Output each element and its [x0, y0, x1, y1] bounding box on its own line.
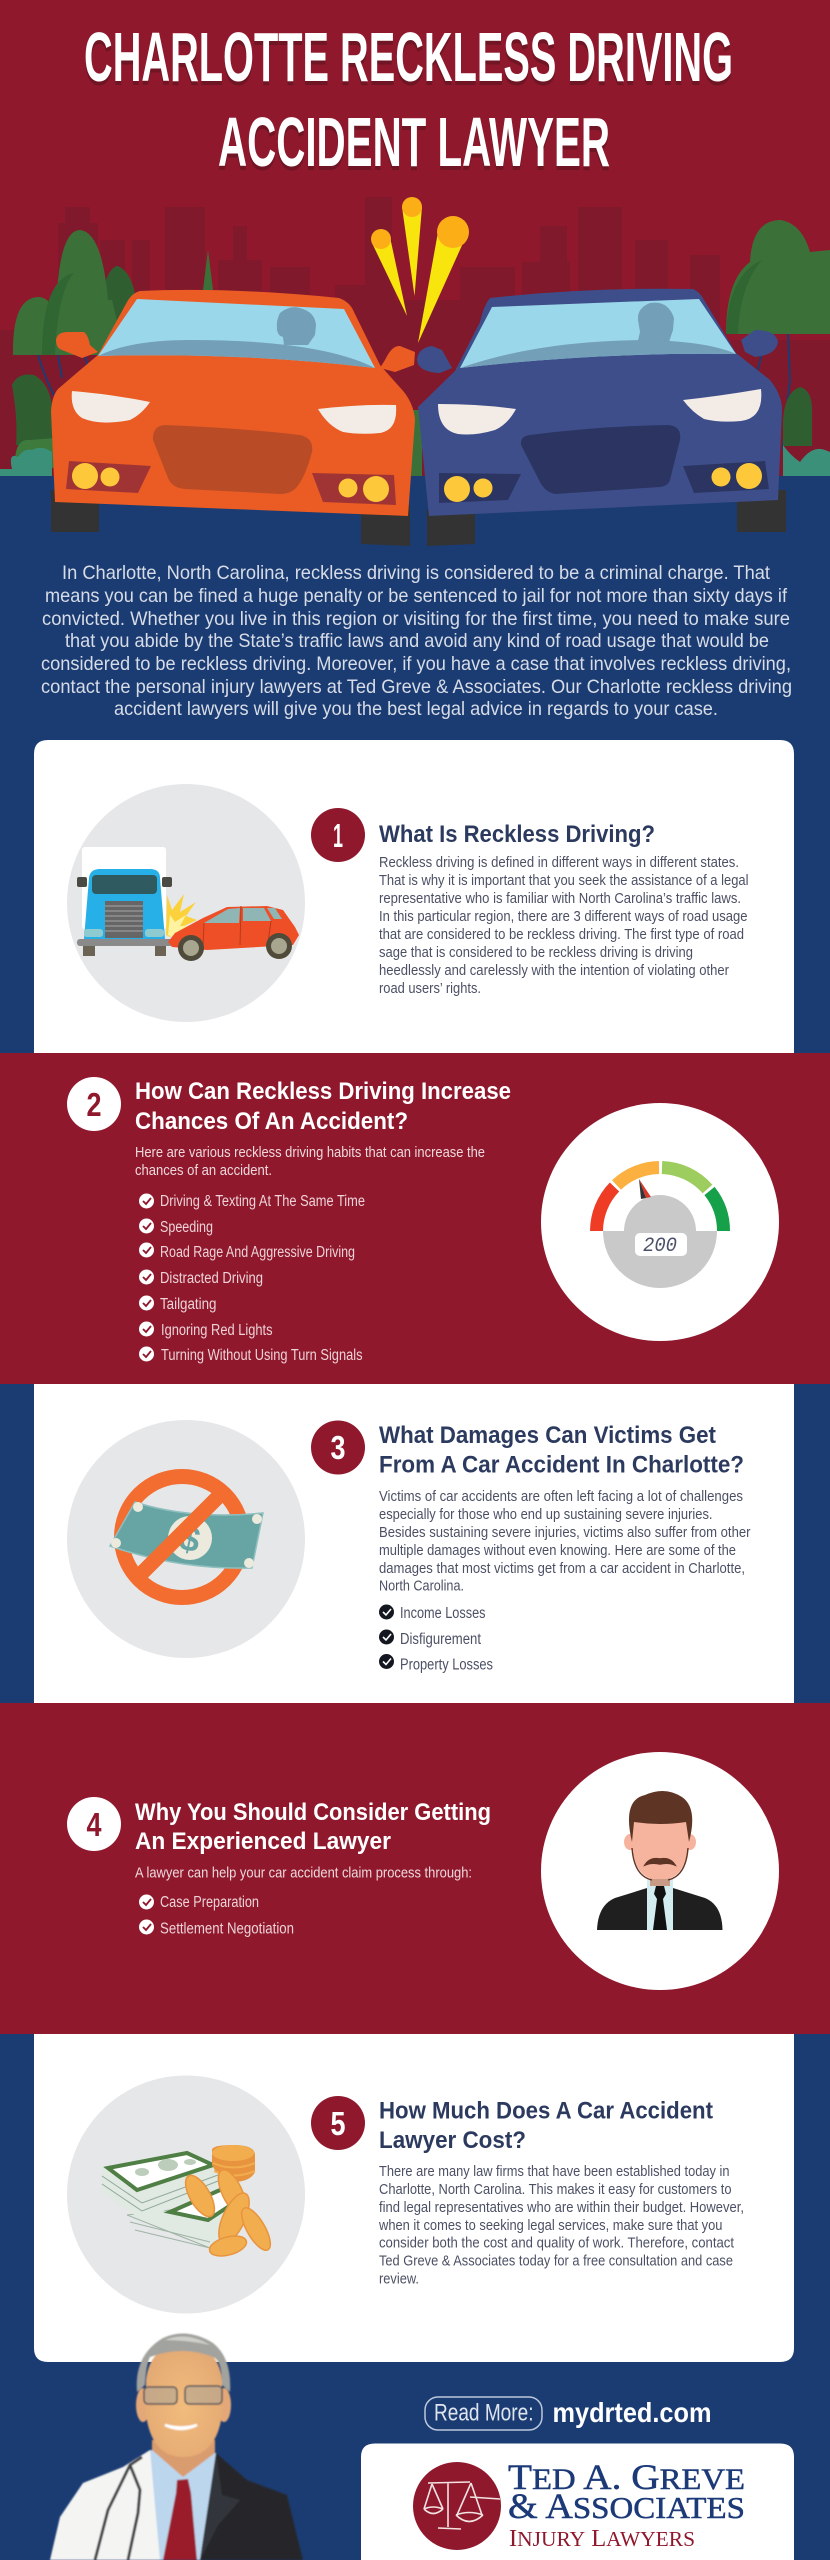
heading 5: How Much Does A Car Accident — [379, 2098, 713, 2124]
blue car — [417, 289, 786, 546]
right trees — [726, 220, 830, 476]
firm name: TED A. GREVE — [508, 2457, 745, 2497]
heading 1: What Is Reckless Driving? — [379, 821, 655, 848]
body text 1: road users’ rights. — [379, 980, 481, 997]
body text 2: Here are various reckless driving habits that can increase the — [135, 1144, 485, 1161]
impact sparks — [371, 197, 469, 343]
body text 3: damages that most victims get from a car accident in Charlotte, — [379, 1560, 745, 1577]
body text 5: Ted Greve & Associates today for a free consultation and case — [379, 2252, 733, 2270]
checklist 2: Driving & Texting At The Same Time — [160, 1193, 365, 1210]
body text 1: that are considered to be reckless driving. The first type of road — [379, 926, 744, 943]
panel: section 5 lawyer cost — [34, 2034, 794, 2362]
checklist 2: Speeding — [160, 1219, 213, 1236]
body text 5: find legal representatives who are within their budget. However, — [379, 2199, 744, 2216]
body text 3: North Carolina. — [379, 1578, 464, 1594]
read more link: mydrted.com — [552, 2397, 712, 2428]
badge 3: 3 — [330, 1429, 346, 1466]
body text 3: Besides sustaining severe injuries, victims also suffer from other — [379, 1524, 750, 1541]
icon: lawyer portrait — [541, 1752, 779, 1990]
body text 2: chances of an accident. — [135, 1162, 272, 1179]
panel: section 1 what is reckless driving — [34, 740, 794, 1053]
panel: section 4 experienced lawyer — [0, 1703, 830, 2034]
badge 2: 2 — [86, 1086, 102, 1123]
body text 1: heedlessly and carelessly with the intention of violating other — [379, 962, 729, 979]
heading 5 — [379, 2098, 713, 2154]
intro paragraph: convicted. Whether you live in this region or visiting for the first time, you need to make sure — [42, 608, 790, 630]
body text 2 — [135, 1144, 485, 1179]
intro paragraph: In Charlotte, North Carolina, reckless driving is considered to be a criminal charge. That — [62, 562, 771, 584]
portrait: doctor in coat and suit — [50, 2334, 303, 2560]
body text 1: representative who is familiar with North Carolina’s traffic laws. — [379, 890, 741, 907]
icon: scales of justice — [413, 2462, 501, 2550]
icon: money stacks and coins — [67, 2076, 305, 2314]
intro paragraph: means you can be fined a huge penalty or be sentenced to jail for not more than sixty days if — [45, 585, 788, 607]
badge 3 — [311, 1420, 365, 1474]
heading 4: An Experienced Lawyer — [135, 1828, 391, 1855]
body text 1: In this particular region, there are 3 different ways of road usage — [379, 908, 748, 925]
body text 5: consider both the cost and quality of work. Therefore, contact — [379, 2234, 735, 2252]
body text 5: review. — [379, 2270, 419, 2288]
checklist 2: Ignoring Red Lights — [161, 1322, 273, 1339]
intro paragraph: accident lawyers will give you the best legal advice in regards to your case. — [114, 698, 718, 720]
checklist 3: Disfigurement — [400, 1631, 482, 1648]
body text 4: A lawyer can help your car accident claim process through: — [135, 1864, 472, 1882]
panel: section 2 increased accident chances — [0, 1053, 830, 1384]
body text 1: That is why it is important that you seek the assistance of a legal — [379, 872, 748, 889]
icon: speedometer gauge: 200 — [643, 1235, 677, 1258]
road — [0, 476, 830, 560]
body text 3 — [379, 1488, 750, 1594]
intro paragraph — [41, 562, 792, 720]
hero illustration: city, trees and two colliding cars — [0, 0, 830, 560]
body text 5: Charlotte, North Carolina. This makes it easy for customers to — [379, 2181, 732, 2198]
city skyline silhouette — [0, 197, 830, 476]
checklist 3 — [379, 1604, 493, 1674]
badge 4: 4 — [86, 1806, 102, 1843]
firm name: & ASSOCIATES — [508, 2486, 745, 2526]
heading 2: How Can Reckless Driving Increase — [135, 1078, 511, 1105]
panel: section 3 damages — [34, 1384, 794, 1703]
left trees — [0, 230, 213, 476]
icon: truck and car collision — [67, 784, 305, 1022]
badge 1: 1 — [333, 817, 343, 854]
checklist 4: Case Preparation — [160, 1894, 259, 1911]
checklist 2: Turning Without Using Turn Signals — [161, 1347, 363, 1364]
checklist 4 — [139, 1894, 294, 1938]
body text 5 — [378, 2163, 744, 2288]
body text 1: Reckless driving is defined in different ways in different states. — [379, 854, 739, 871]
badge 4 — [67, 1797, 121, 1851]
icon: prohibited money: $ — [176, 1516, 204, 1561]
panel: law firm logo — [361, 2444, 794, 2560]
intro paragraph: that you abide by the State’s traffic laws and avoid any kind of road usage that would be — [65, 630, 769, 652]
checklist 2: Road Rage And Aggressive Driving — [160, 1244, 355, 1261]
heading 3 — [379, 1422, 744, 1478]
icon: speedometer gauge — [541, 1103, 779, 1341]
firm name — [508, 2457, 745, 2552]
checklist 2: Distracted Driving — [160, 1270, 263, 1287]
firm name: INJURY LAWYERS — [509, 2526, 695, 2552]
title — [84, 18, 733, 185]
heading 4 — [135, 1799, 491, 1855]
checklist 2: Tailgating — [160, 1296, 216, 1313]
heading 5: Lawyer Cost? — [379, 2127, 526, 2154]
read more link: Read More: — [434, 2400, 534, 2426]
intro paragraph: considered to be reckless driving. Moreover, if you have a case that involves reckless driving, — [41, 653, 791, 675]
body text 3: especially for those who end up sustaining severe injuries. — [379, 1506, 712, 1523]
body text 1: sage that is considered to be reckless driving is driving — [379, 944, 693, 961]
heading 2: Chances Of An Accident? — [135, 1108, 408, 1135]
badge 5: 5 — [330, 2105, 346, 2142]
body text 1 — [379, 854, 748, 997]
read more link — [425, 2397, 712, 2430]
heading 2 — [135, 1078, 511, 1135]
heading 4: Why You Should Consider Getting — [135, 1799, 491, 1826]
body text 5: There are many law firms that have been established today in — [379, 2163, 730, 2180]
badge 2 — [67, 1077, 121, 1131]
checklist 3: Income Losses — [400, 1605, 486, 1622]
heading 3: What Damages Can Victims Get — [379, 1422, 716, 1449]
intro paragraph: contact the personal injury lawyers at Ted Greve & Associates. Our Charlotte reckless driving — [41, 676, 792, 698]
badge 1 — [311, 808, 365, 862]
icon: prohibited money — [67, 1420, 305, 1658]
checklist 4: Settlement Negotiation — [160, 1920, 294, 1938]
body text 5: when it comes to seeking legal services, make sure that you — [378, 2217, 722, 2234]
orange car — [51, 290, 415, 546]
body text 3: multiple damages without even knowing. Here are some of the — [379, 1542, 736, 1559]
body text 3: Victims of car accidents are often left facing a lot of challenges — [379, 1488, 743, 1505]
checklist 2 — [139, 1193, 365, 1364]
badge 5 — [311, 2096, 365, 2150]
heading 3: From A Car Accident In Charlotte? — [379, 1452, 744, 1478]
checklist 3: Property Losses — [400, 1656, 493, 1674]
